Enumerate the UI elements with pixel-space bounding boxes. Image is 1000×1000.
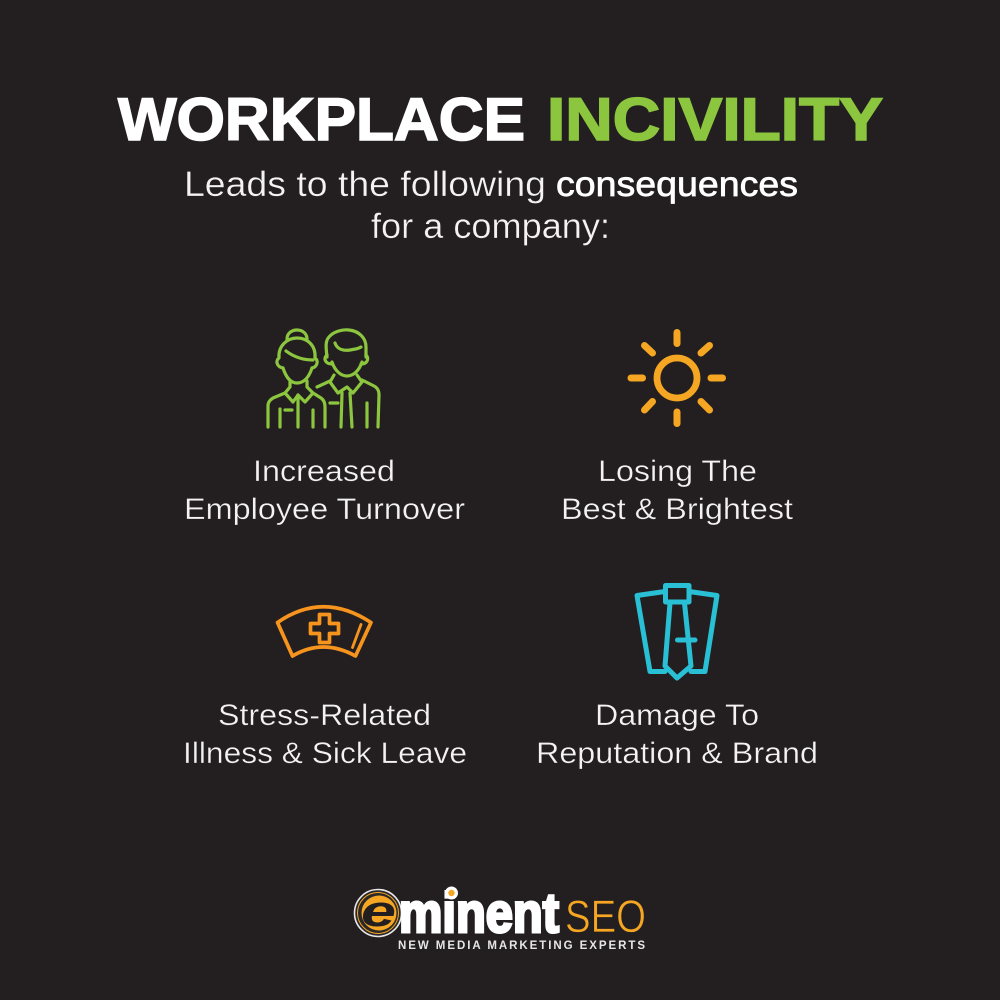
icon: employees xyxy=(268,330,379,427)
label: sick leave: Illness & Sick Leave xyxy=(183,737,467,770)
logo badge xyxy=(354,887,402,936)
title xyxy=(118,86,883,153)
label: reputation and brand: Reputation & Brand xyxy=(536,737,818,770)
logo SEO: SEO xyxy=(565,891,646,942)
subtitle xyxy=(184,164,798,246)
label: reputation and brand xyxy=(536,699,818,770)
subtitle: Leads to the following xyxy=(184,164,546,204)
logo tagline: NEW MEDIA MARKETING EXPERTS xyxy=(398,940,645,952)
title: INCIVILITY xyxy=(547,86,883,153)
title: WORKPLACE xyxy=(118,86,525,153)
label: best and brightest: Best & Brightest xyxy=(561,493,794,526)
label: sick leave xyxy=(183,699,467,770)
label: employee turnover: Employee Turnover xyxy=(184,493,465,526)
logo badge: e xyxy=(361,887,396,936)
icon: suit xyxy=(637,586,717,678)
label: sick leave: Stress-Related xyxy=(218,699,431,732)
subtitle: consequences xyxy=(556,164,798,204)
logo dot xyxy=(445,886,458,900)
label: employee turnover: Increased xyxy=(253,455,395,488)
label: employee turnover xyxy=(184,455,465,526)
logo wordmark: minent xyxy=(399,881,559,944)
label: best and brightest xyxy=(561,455,794,526)
label: reputation and brand: Damage To xyxy=(595,699,759,732)
logo: Eminent SEO xyxy=(354,881,646,952)
subtitle: for a company: xyxy=(371,206,610,246)
icon: nurse cap xyxy=(278,607,371,656)
icon: sun xyxy=(631,332,722,424)
label: best and brightest: Losing The xyxy=(598,455,757,488)
